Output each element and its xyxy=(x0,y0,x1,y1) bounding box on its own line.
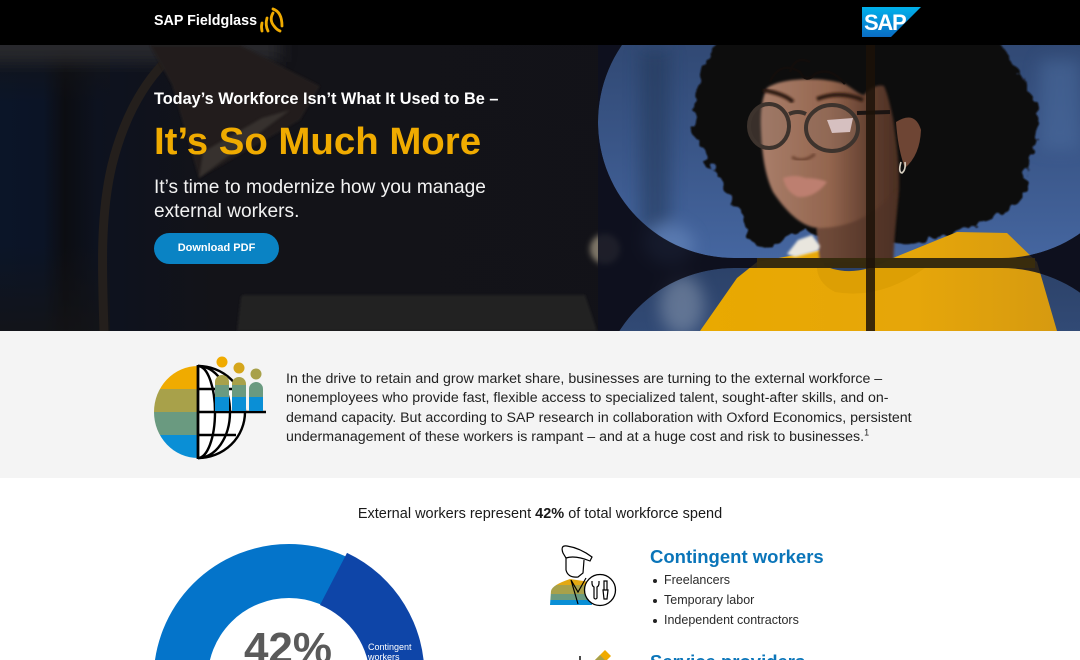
SAP logo: SAP xyxy=(864,10,906,35)
glasses reflection xyxy=(827,118,853,133)
hero kicker: Today’s Workforce Isn’t What It Used to Be – xyxy=(154,90,498,108)
sweater collar xyxy=(817,258,925,294)
woman xyxy=(693,30,1057,331)
forehead curls xyxy=(770,60,845,84)
lamp xyxy=(102,45,320,331)
section heading: External workers represent 42% of total workforce spend xyxy=(358,506,722,522)
contingent workers list: Freelancers xyxy=(664,573,730,587)
laptop xyxy=(237,295,597,331)
blurred background highlights xyxy=(640,50,1080,335)
intro paragraph: undermanagement of these workers is rampant – and at a huge cost and risk to businesses.1 xyxy=(286,427,869,445)
download button xyxy=(154,233,279,264)
horizontal cross bar over sweater xyxy=(757,258,1035,268)
brand name: SAP Fieldglass xyxy=(154,13,257,29)
sweater xyxy=(700,232,1057,331)
icon: contingent worker xyxy=(550,545,616,606)
intro paragraph: nonemployees who provide fast, flexible access to specialized talent, sought-after skills, and on- xyxy=(286,390,889,406)
contingent workers list: Independent contractors xyxy=(664,613,799,627)
earring xyxy=(900,162,905,173)
light glare on shoulder xyxy=(787,235,820,257)
hero subtitle: It’s time to modernize how you manage xyxy=(154,177,486,198)
hero title: It’s So Much More xyxy=(154,120,481,163)
hero subtitle: external workers. xyxy=(154,201,299,222)
ear xyxy=(896,118,921,168)
hero subtitle xyxy=(154,177,486,222)
contingent workers heading: Contingent workers xyxy=(650,546,824,567)
panel: intro band xyxy=(0,331,1080,478)
contingent workers list xyxy=(653,573,799,627)
hero photo background xyxy=(0,45,1080,331)
icon: globe with people xyxy=(154,356,266,460)
intro paragraph xyxy=(286,371,912,445)
blue window panes xyxy=(598,0,1080,540)
left wall fade xyxy=(0,45,110,331)
icon: Fieldglass swirl xyxy=(260,8,284,32)
header bar xyxy=(0,0,1080,45)
intro paragraph: In the drive to retain and grow market share, businesses are turning to the external workforce – xyxy=(286,371,882,387)
icon: service provider pencil xyxy=(579,650,611,660)
donut chart: Contingent xyxy=(368,642,412,652)
nose shadow xyxy=(792,154,815,160)
lips xyxy=(783,176,827,197)
contingent workers list: Temporary labor xyxy=(664,593,754,607)
face and neck xyxy=(761,79,899,262)
SAP logo xyxy=(862,7,921,37)
eyebrows xyxy=(763,90,863,102)
background top haze xyxy=(0,30,280,62)
download button: Download PDF xyxy=(178,242,255,254)
intro paragraph: demand capacity. But according to SAP research in collaboration with Oxford Economics, persistent xyxy=(286,410,912,426)
hair xyxy=(693,30,1038,247)
bokeh light xyxy=(590,234,620,264)
donut chart xyxy=(155,544,424,660)
dark mask outside panes xyxy=(598,0,1080,540)
glasses xyxy=(749,104,890,151)
neck shadow xyxy=(817,190,897,262)
window cross bar xyxy=(866,45,875,331)
